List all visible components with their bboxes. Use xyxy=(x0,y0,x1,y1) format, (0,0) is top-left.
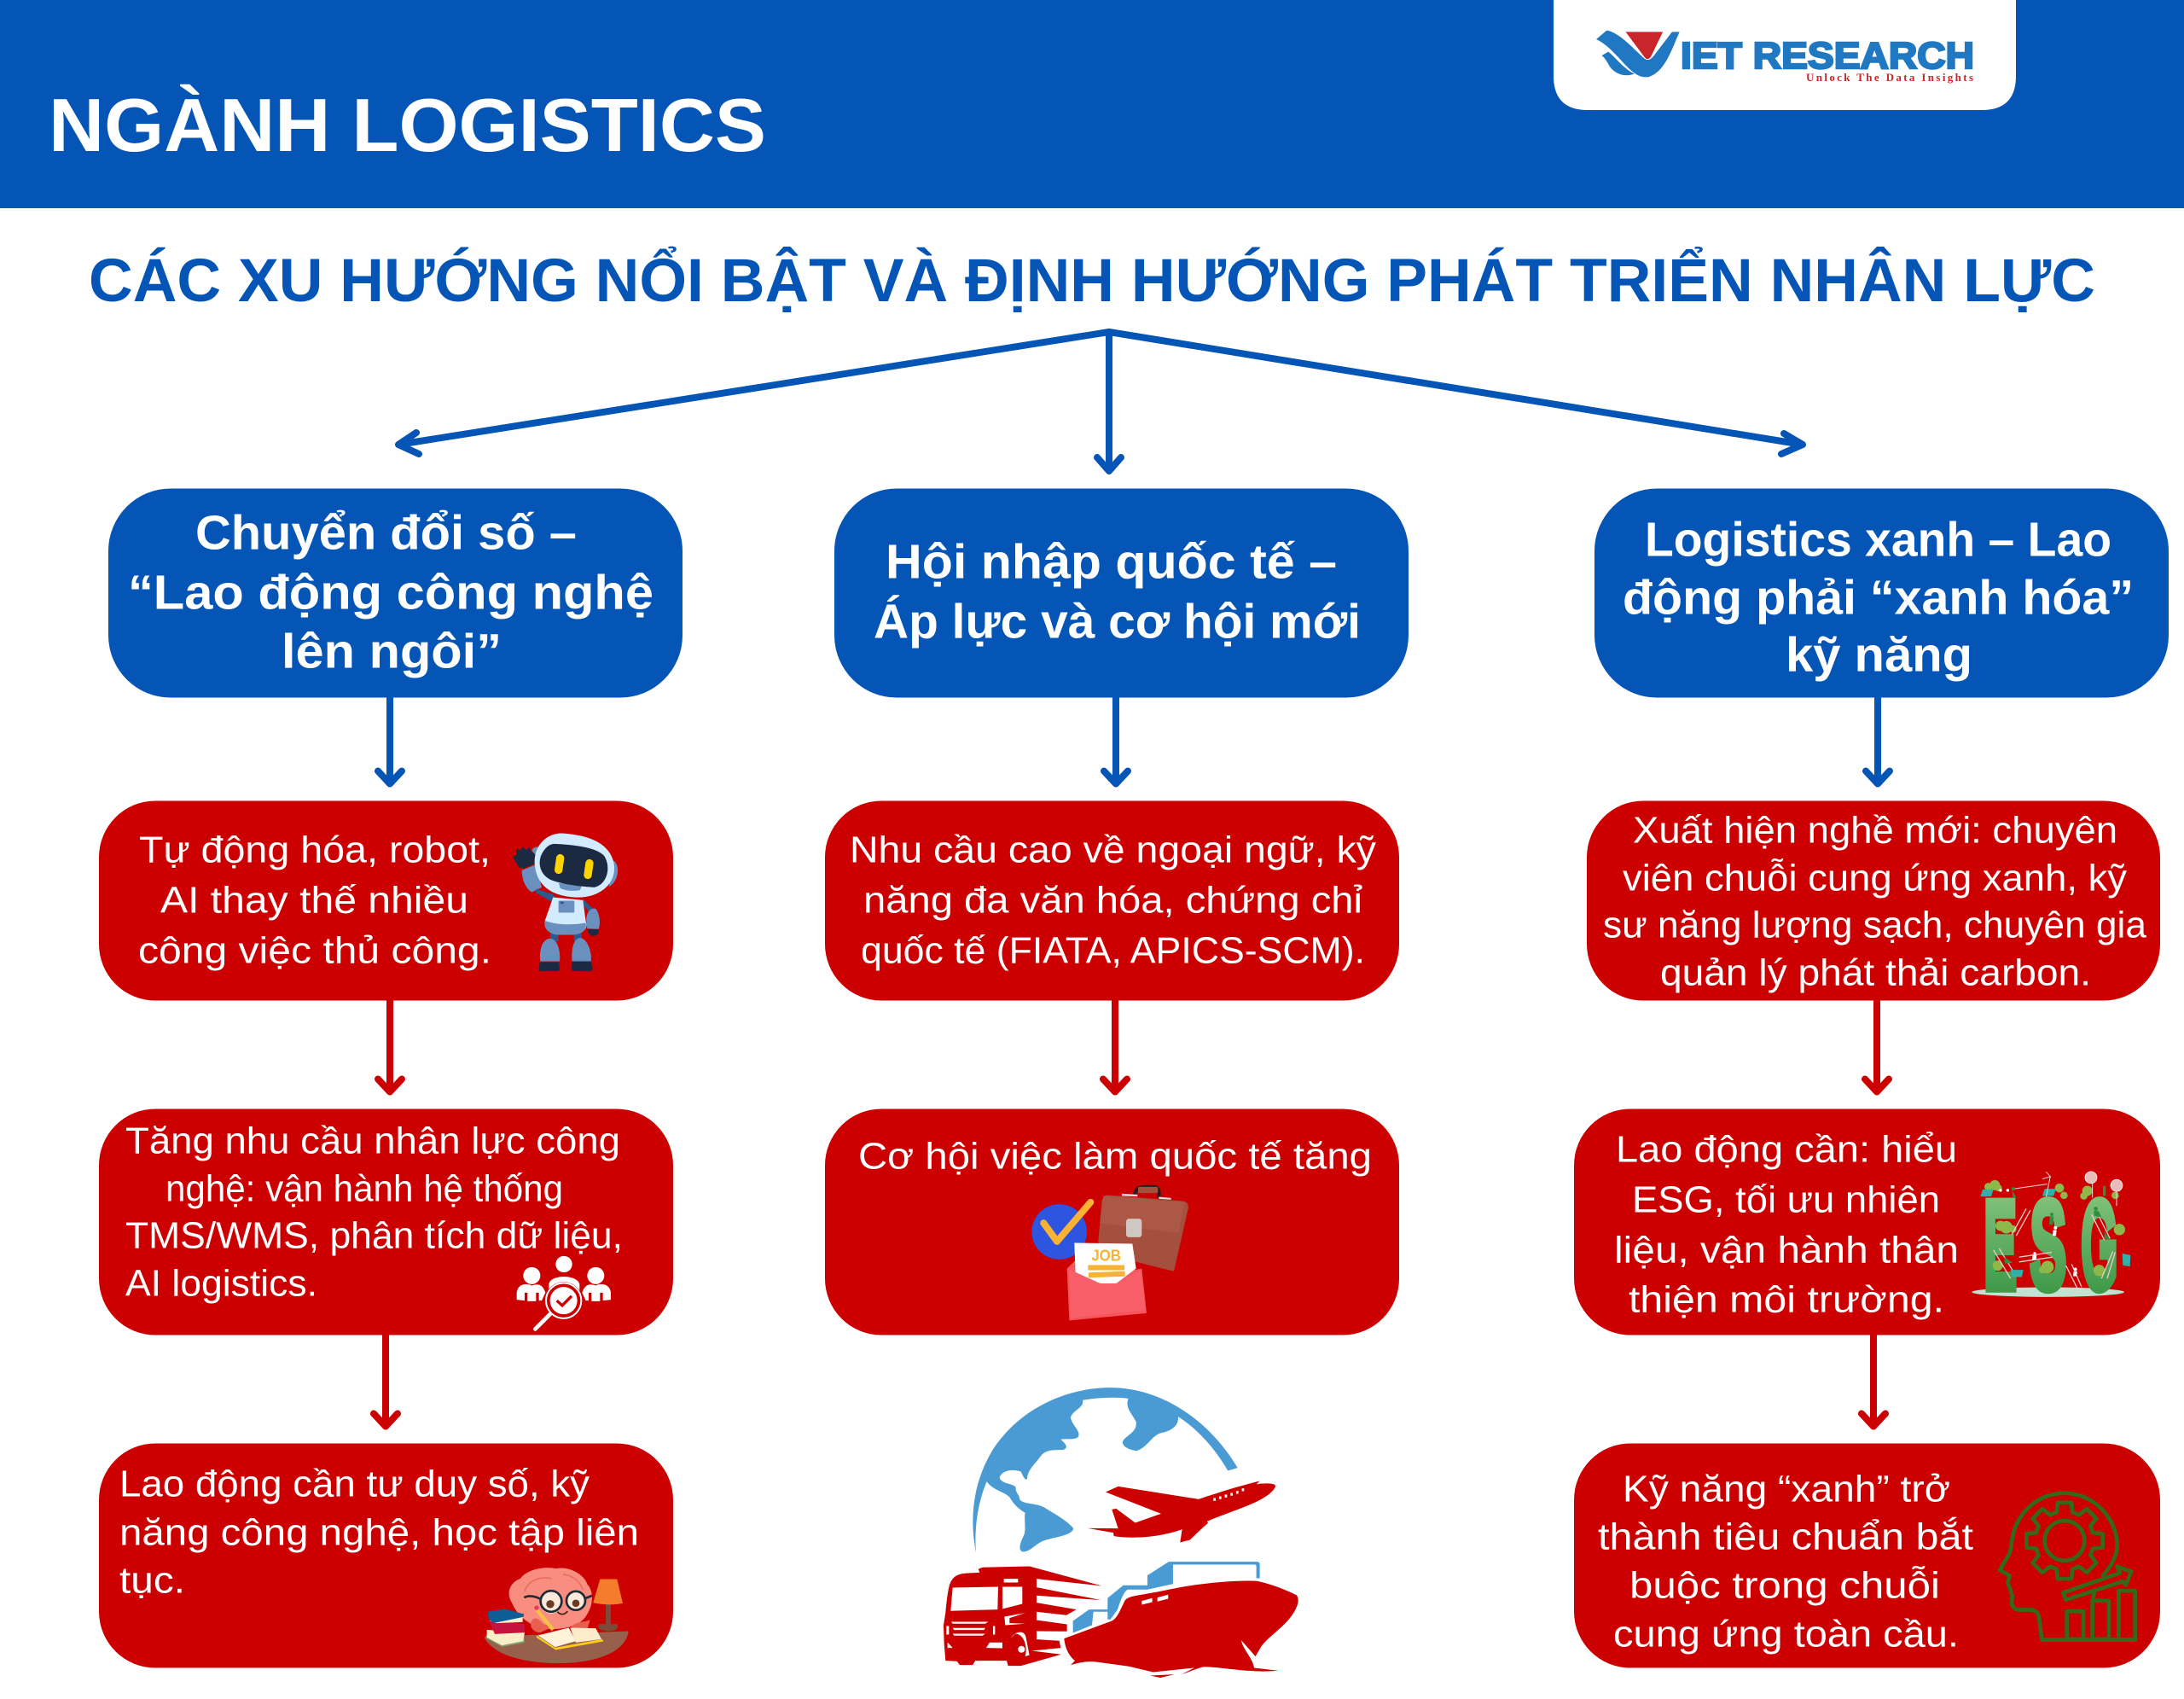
panel: ESG skills: liệu, vận hành thân xyxy=(1614,1229,1959,1271)
panel: green skills standard: buộc trong chuỗi xyxy=(1629,1565,1940,1606)
panel: new jobs: Xuất hiện nghề mới: chuyên xyxy=(1633,809,2117,852)
globe xyxy=(973,1388,1238,1552)
arrows: heading to three columns xyxy=(398,332,1803,471)
panel: digital transformation heading xyxy=(108,488,682,698)
arrow xyxy=(1866,698,1890,783)
panel: new jobs: quản lý phát thải carbon. xyxy=(1660,952,2091,993)
arrow xyxy=(374,1335,398,1427)
panel: tech workforce demand: TMS/WMS, phân tích dữ liệu, xyxy=(125,1215,623,1256)
panel: skills demand: Nhu cầu cao về ngoại ngữ, kỹ xyxy=(850,829,1376,870)
panel: green logistics heading xyxy=(1594,488,2169,698)
icon: ESG letters with trees xyxy=(1972,1172,2130,1317)
arrow xyxy=(378,698,402,783)
ship xyxy=(1064,1562,1298,1678)
title: NGÀNH LOGISTICS xyxy=(49,83,766,167)
logo: Viet Research: IET RESEARCH xyxy=(1681,35,1974,77)
panel: ESG skills: thiện môi trường. xyxy=(1629,1278,1944,1321)
panel: skills demand xyxy=(825,800,1399,1000)
icon: job offer, briefcase and check xyxy=(1031,1187,1188,1320)
panel: ESG skills: Lao động cần: hiểu xyxy=(1616,1128,1957,1171)
panel: digital mindset: Lao động cần tư duy số, kỹ xyxy=(119,1463,590,1505)
panel: tech workforce demand xyxy=(99,1109,673,1335)
panel: green skills standard: Kỹ năng “xanh” trở xyxy=(1623,1468,1950,1510)
panel: skills demand: năng đa văn hóa, chứng chỉ xyxy=(863,879,1362,922)
arrow xyxy=(1103,1000,1127,1092)
panel: new jobs: viên chuỗi cung ứng xanh, kỹ xyxy=(1623,857,2127,899)
panel: tech workforce demand: AI logistics. xyxy=(125,1263,317,1304)
subtitle heading: CÁC XU HƯỚNG NỔI BẬT VÀ ĐỊNH HƯỚNG PHÁT TRIỂN NHÂN LỰC xyxy=(89,247,2095,315)
panel: ESG skills: ESG, tối ưu nhiên xyxy=(1632,1179,1940,1220)
logo: Viet Research xyxy=(1554,0,2016,110)
panel: digital mindset: năng công nghệ, học tập liên xyxy=(119,1512,639,1553)
icon: ESG letters with trees: S xyxy=(2030,1173,2067,1317)
panel: automation xyxy=(99,800,673,1000)
icon: people and magnifier xyxy=(517,1256,611,1329)
panel: automation: AI thay thế nhiều xyxy=(160,879,468,922)
panel: digital mindset xyxy=(99,1444,673,1667)
icon: job offer, briefcase and check: JOB xyxy=(1091,1246,1121,1264)
plane xyxy=(1088,1481,1275,1542)
panel: tech workforce demand: nghệ: vận hành hệ thống xyxy=(166,1167,563,1210)
panel: international integration heading xyxy=(834,488,1409,698)
column 2: international integration xyxy=(825,488,1409,1678)
arrow xyxy=(1862,1335,1885,1427)
panel: digital transformation heading: Chuyển đổi số – xyxy=(195,505,577,560)
panel: skills demand: quốc tế (FIATA, APICS-SCM). xyxy=(861,930,1365,971)
column 3: green logistics xyxy=(1574,488,2169,1667)
icon: brain studying xyxy=(484,1568,629,1663)
icon: ESG letters with trees: E xyxy=(1984,1173,2017,1317)
panel: international integration heading: Hội nhập quốc tế – xyxy=(886,534,1337,589)
panel: green logistics heading: kỹ năng xyxy=(1786,628,1972,683)
icon: head with gear and growth chart xyxy=(2000,1493,2135,1639)
logo: Viet Research: Unlock The Data Insights xyxy=(1806,71,1973,84)
truck xyxy=(944,1566,1102,1666)
arrow xyxy=(1104,698,1128,783)
panel: green skills standard xyxy=(1574,1444,2160,1667)
arrow xyxy=(378,1000,402,1092)
panel: green logistics heading: động phải “xanh hóa” xyxy=(1623,570,2134,625)
icon: robot xyxy=(513,833,618,971)
panel: digital mindset: tục. xyxy=(119,1560,185,1601)
panel: international integration heading: Áp lực và cơ hội mới xyxy=(874,594,1361,649)
panel: green logistics heading: Logistics xanh – Lao xyxy=(1645,512,2111,567)
header band xyxy=(0,0,2184,208)
panel: green skills standard: thành tiêu chuẩn bắt xyxy=(1598,1516,1973,1558)
panel: ESG skills: G xyxy=(2081,1173,2118,1317)
column 1: digital transformation xyxy=(99,488,682,1667)
panel: green skills standard: cung ứng toàn cầu. xyxy=(1613,1613,1959,1655)
panel: automation: công việc thủ công. xyxy=(138,930,491,971)
arrow xyxy=(1865,1000,1889,1092)
panel: tech workforce demand: Tăng nhu cầu nhân lực công xyxy=(125,1120,620,1162)
panel: new jobs: sư năng lượng sạch, chuyên gia xyxy=(1603,905,2147,946)
panel: digital transformation heading: “Lao động công nghệ xyxy=(128,565,653,620)
illustration: globe, plane, truck and ship xyxy=(944,1388,1298,1678)
panel: ESG skills xyxy=(1574,1109,2160,1335)
panel: automation: Tự động hóa, robot, xyxy=(139,829,491,870)
panel: international job opportunities xyxy=(825,1109,1399,1335)
panel: digital transformation heading: lên ngôi” xyxy=(282,625,502,679)
panel: international job opportunities: Cơ hội việc làm quốc tế tăng xyxy=(858,1135,1372,1178)
panel: new jobs xyxy=(1587,800,2160,1000)
